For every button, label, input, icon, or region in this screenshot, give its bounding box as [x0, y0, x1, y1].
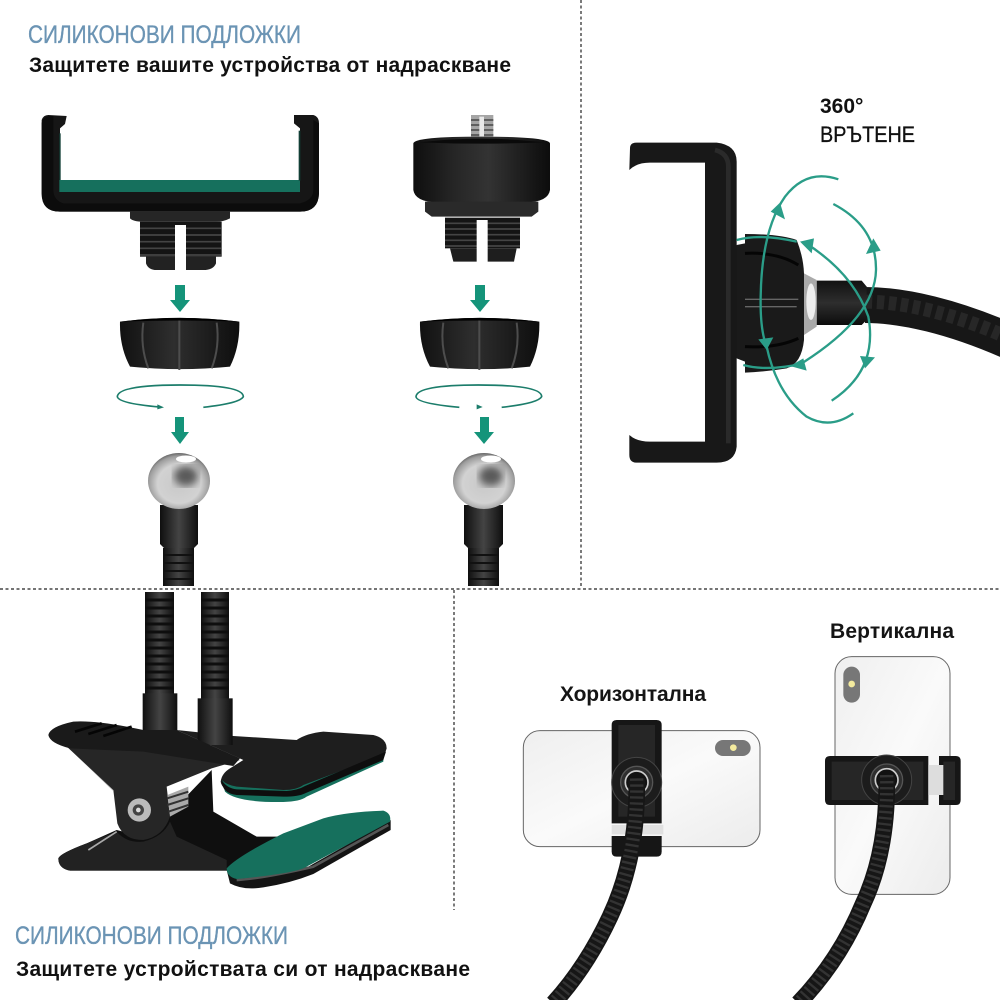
- subheading: protect devices bottom: Защитете устройствата си от надраскване: [16, 958, 470, 981]
- label: 360 rotation: 360°: [820, 95, 863, 118]
- ball joint right: [453, 453, 515, 586]
- swivel phone holder: [629, 143, 1000, 463]
- subheading: protect devices top: Защитете вашите устройства от надраскване: [29, 54, 511, 77]
- rotation ellipse right: [416, 385, 542, 409]
- locking nut right: [420, 318, 539, 370]
- label: vertical: Вертикална: [830, 620, 954, 643]
- phone clamp with green pads: [42, 115, 319, 273]
- desk clamp: [48, 693, 391, 888]
- label: 360 rotation: [820, 95, 915, 147]
- heading: silicone pads bottom: СИЛИКОНОВИ ПОДЛОЖКИ: [15, 922, 288, 950]
- rotation ellipse left: [117, 385, 243, 409]
- tripod adapter: [413, 115, 550, 263]
- label: 360 rotation: ВРЪТЕНЕ: [820, 122, 915, 147]
- label: horizontal: Хоризонтална: [560, 683, 706, 706]
- gooseneck arms: [145, 592, 229, 702]
- heading: silicone pads top: СИЛИКОНОВИ ПОДЛОЖКИ: [28, 21, 301, 49]
- locking nut left: [120, 318, 239, 370]
- ball joint left: [148, 453, 210, 586]
- arrows down left column: [170, 285, 190, 444]
- rotation arrows: [737, 176, 881, 423]
- vertical phone: [798, 657, 961, 1000]
- horizontal phone: [523, 720, 760, 1000]
- arrows down right column: [470, 285, 494, 444]
